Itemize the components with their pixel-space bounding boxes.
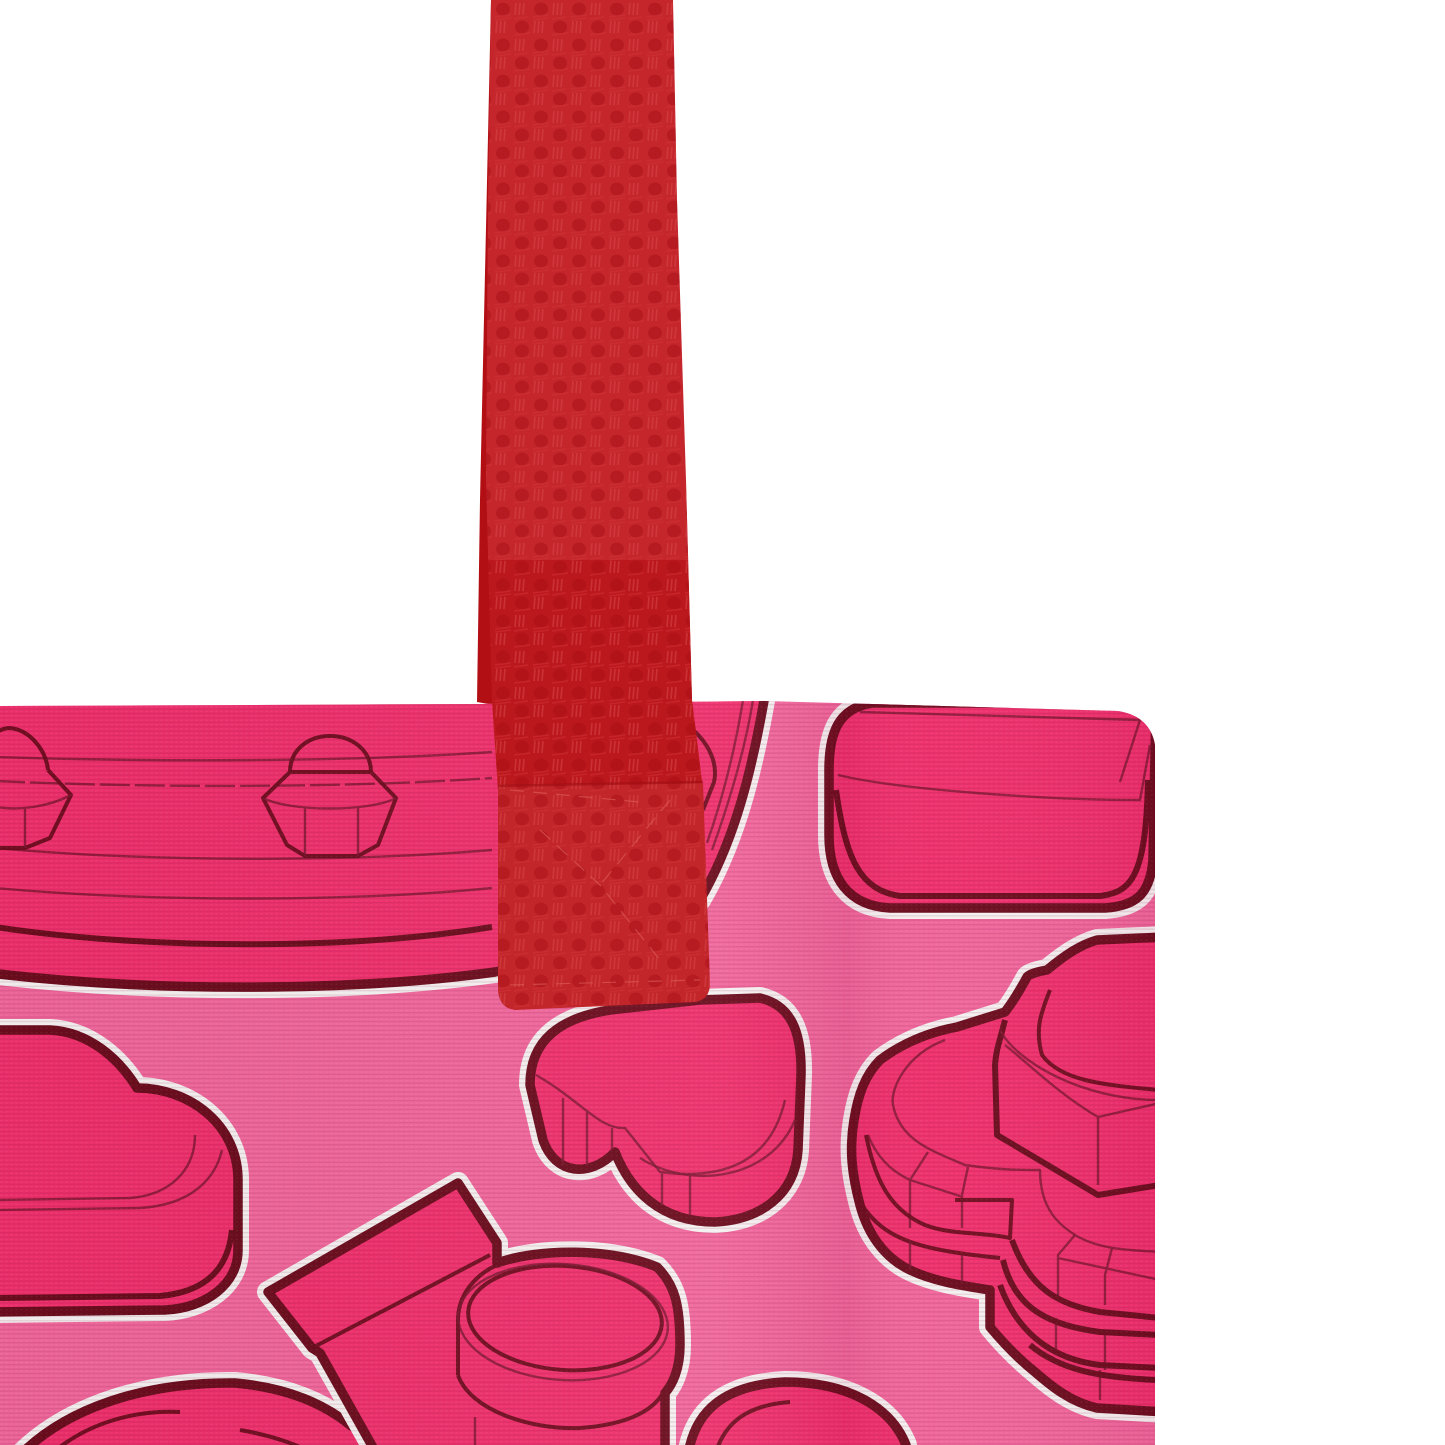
strap stitched tab — [498, 783, 710, 1010]
tote bag product photo — [0, 0, 1155, 1445]
tote bag body with printed pattern — [0, 695, 1165, 1445]
printed shape: small heart centre — [530, 998, 801, 1222]
strap tab fold edge — [498, 782, 703, 786]
strap upper darker shading — [488, 560, 703, 790]
pink fabric background — [0, 695, 1160, 1445]
printed shape: large heart left — [0, 1030, 238, 1312]
bolt on strip, centre — [263, 736, 396, 856]
bolt on strip, left — [0, 728, 71, 848]
printed shape: rounded block top right — [829, 703, 1156, 908]
back strap shadow piece — [477, 0, 520, 706]
printed shape: bolted strip — [0, 695, 765, 987]
printed shape: bottom-left heart — [20, 1383, 400, 1445]
printed shape: bottom-right heart — [688, 1382, 906, 1445]
red strap — [486, 0, 710, 1010]
fabric fold shading — [556, 701, 1155, 1445]
fabric weave texture — [0, 695, 1160, 1445]
strap weave texture — [486, 0, 710, 1010]
strap stitch lines — [510, 790, 700, 985]
printed shape: block and cylinder — [268, 1183, 680, 1445]
strap upper band — [486, 0, 703, 790]
printed shape: stacked hearts right — [852, 937, 1165, 1412]
